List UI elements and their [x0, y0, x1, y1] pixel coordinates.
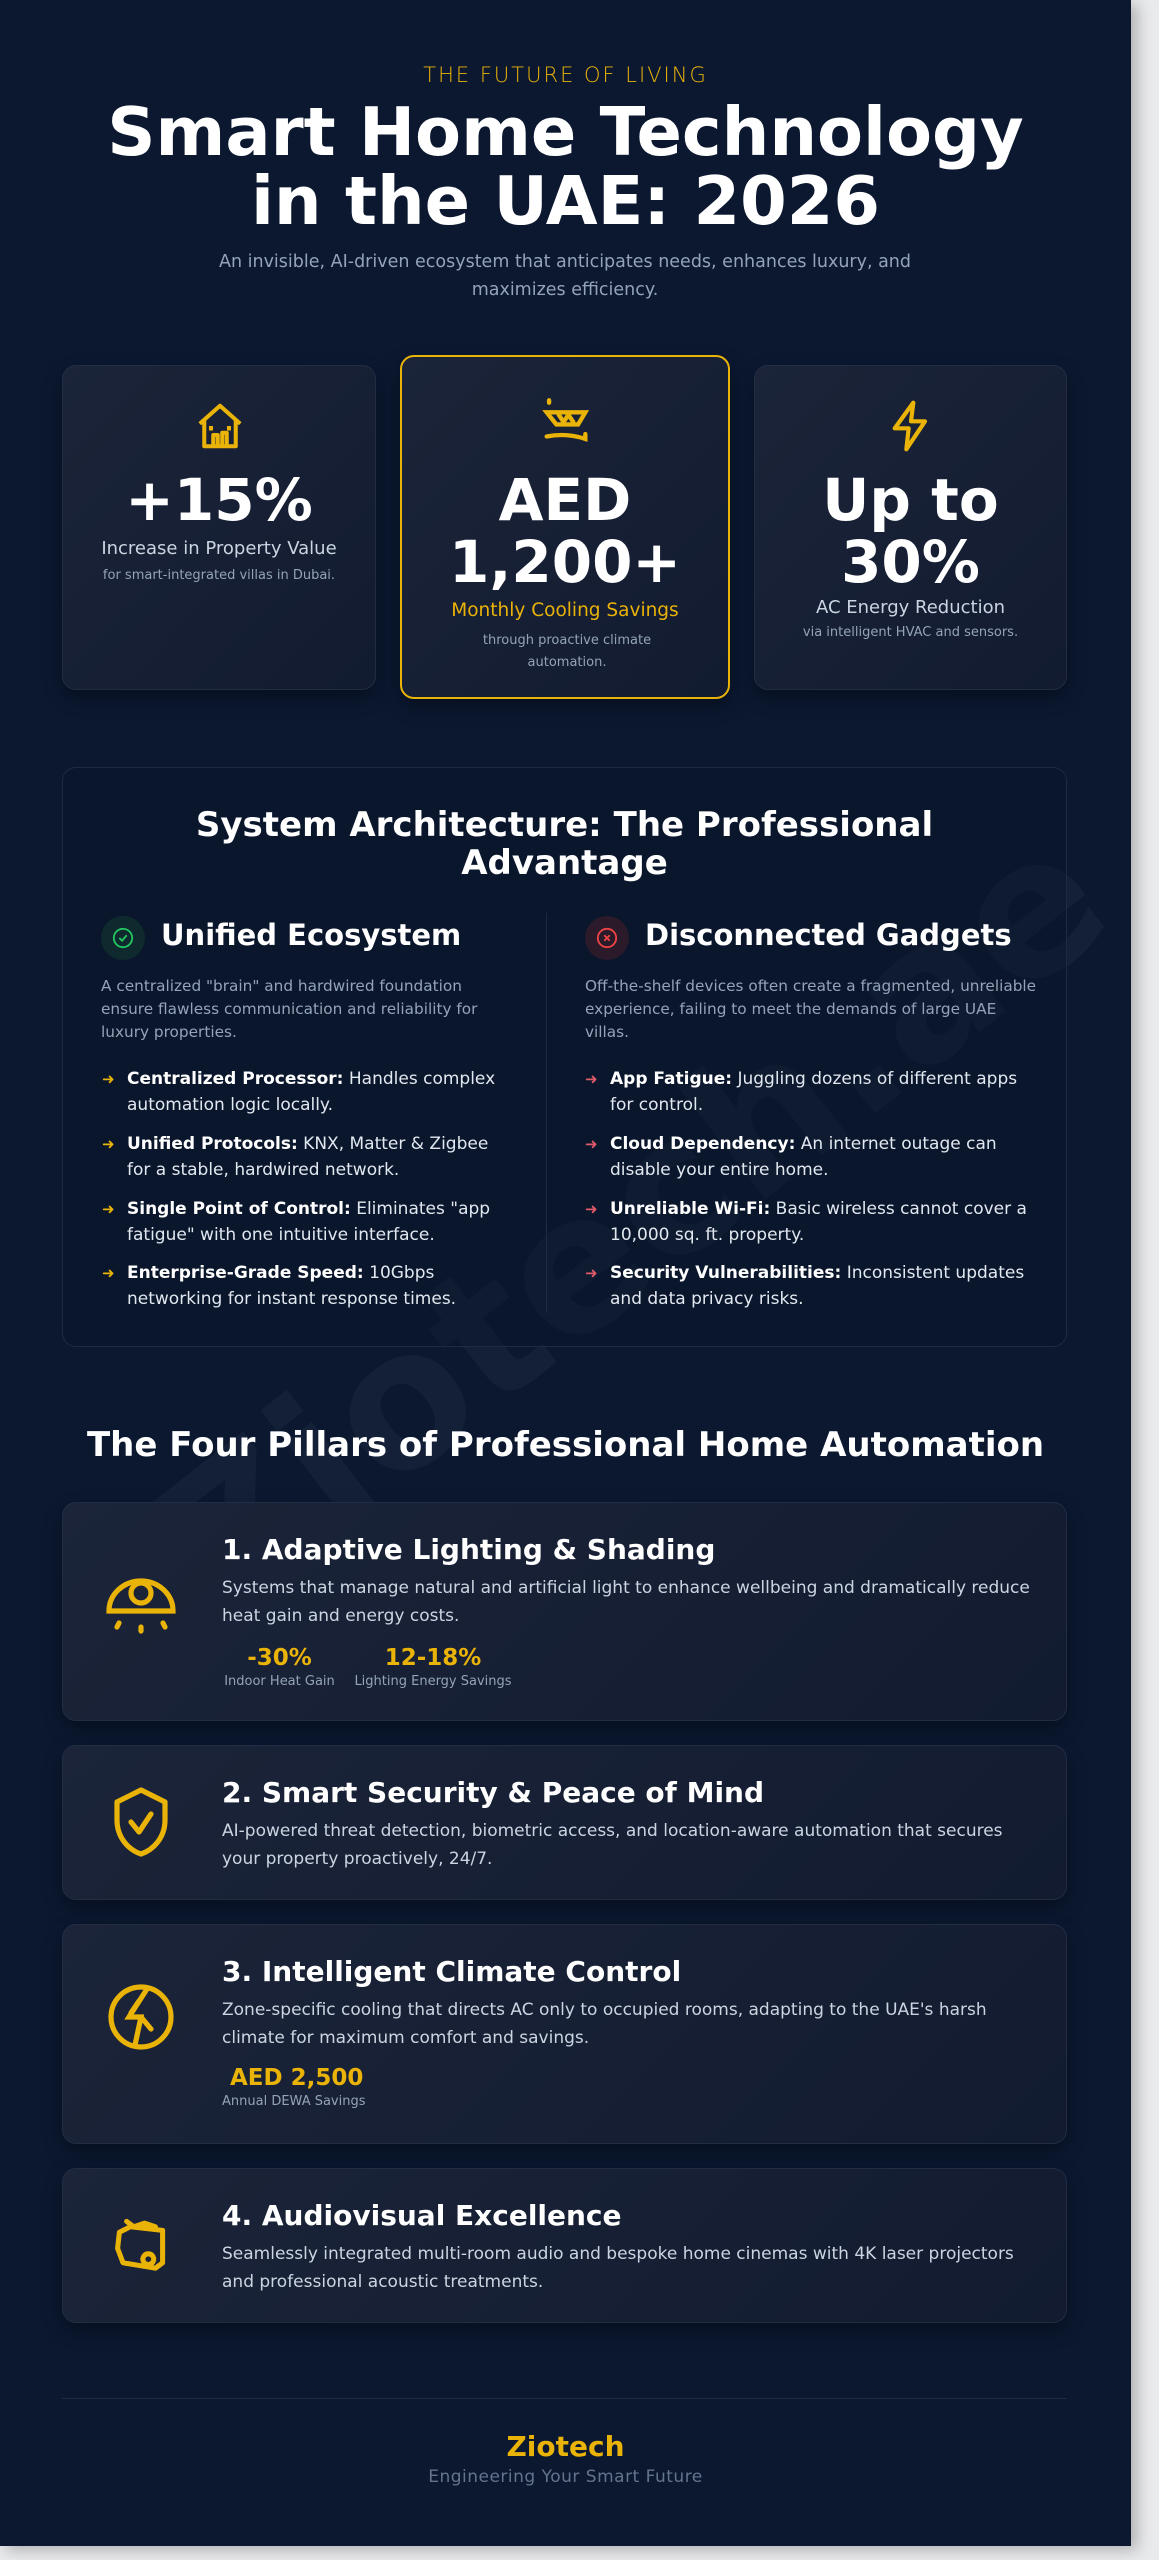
stat: AED 2,500 — [230, 2065, 363, 2091]
pillar 2: 2. Smart Security & Peace of Mind — [222, 1776, 764, 1809]
pillar 3: 3. Intelligent Climate Control — [222, 1955, 681, 1988]
column: disconnected gadgets: ➜ — [585, 1135, 598, 1153]
column: disconnected gadgets: experience, failing to meet the demands of large UAE — [585, 1000, 996, 1018]
stats: -30% — [247, 1645, 312, 1671]
stat card: AC energy: AC Energy Reduction — [816, 597, 1005, 618]
pillar 4: 4. Audiovisual Excellence — [222, 2199, 622, 2232]
column: disconnected gadgets: App Fatigue: Juggling dozens of different apps for control. — [610, 1069, 1017, 1115]
stat card: cooling savings: Monthly Cooling Savings — [451, 600, 679, 621]
stat — [222, 2065, 366, 2109]
icon: climate — [108, 1984, 174, 2050]
icon: shield — [114, 1787, 168, 1857]
footer brand: Engineering Your Smart Future — [428, 2467, 703, 2487]
column: unified ecosystem — [101, 916, 495, 1309]
column: unified ecosystem: Unified Ecosystem — [161, 918, 461, 952]
icon: audiovisual — [115, 2218, 166, 2271]
heading: System Architecture: The Professional — [196, 805, 933, 845]
icon: check — [101, 916, 145, 960]
pillar 1: Lighting Energy Savings — [354, 1674, 512, 1689]
stats — [224, 1645, 335, 1689]
pillar 3 — [62, 1924, 1067, 2144]
column: disconnected gadgets: Disconnected Gadgets — [645, 918, 1012, 952]
column: unified ecosystem: ➜ — [102, 1200, 115, 1218]
stats: Indoor Heat Gain — [224, 1674, 335, 1689]
column: disconnected gadgets: Unreliable Wi-Fi: Basic wireless cannot cover a 10,000 sq. ft. property. — [610, 1199, 1027, 1245]
stat card: property value — [62, 365, 376, 690]
heading: Advantage — [461, 843, 668, 883]
stat card: property value: Increase in Property Value — [101, 538, 337, 559]
value: 1,200+ — [449, 528, 681, 596]
icon: lighting — [106, 1578, 176, 1634]
panel: system architecture — [62, 767, 1067, 1347]
column: unified ecosystem: A centralized "brain" and hardwired foundation ensure flawless communication and reliability for luxury properties. — [101, 977, 477, 1041]
footer brand: Ziotech — [506, 2430, 625, 2463]
column: unified ecosystem: ➜ — [102, 1070, 115, 1088]
value — [822, 466, 999, 596]
column: unified ecosystem: Single Point of Control: Eliminates "app fatigue" with one intuitive interface. — [127, 1199, 490, 1245]
column: disconnected gadgets: ➜ — [585, 1264, 598, 1282]
stat card: cooling savings — [400, 355, 730, 699]
stat: Annual DEWA Savings — [222, 2094, 366, 2109]
column: unified ecosystem: ➜ — [102, 1264, 115, 1282]
stat card: cooling savings: through proactive climate automation. — [483, 633, 651, 670]
subtitle: An invisible, AI-driven ecosystem that anticipates needs, enhances luxury, and maximizes efficiency. — [219, 252, 911, 300]
column: disconnected gadgets: ➜ — [585, 1200, 598, 1218]
title — [107, 93, 1024, 240]
stat card: AC energy — [754, 365, 1067, 690]
pillar 1: 12-18% — [385, 1645, 481, 1671]
value: Up to — [822, 466, 999, 534]
pillar 2 — [62, 1745, 1067, 1900]
pillar 1: Systems that manage natural and artificial light to enhance wellbeing and dramatically reduce heat gain and energy costs. — [222, 1578, 1030, 1626]
pillar 3: Zone-specific cooling that directs AC only to occupied rooms, adapting to the UAE's harsh climate for maximum comfort and savings. — [222, 2000, 987, 2048]
pillar 4: Seamlessly integrated multi-room audio and bespoke home cinemas with 4K laser projectors and professional acoustic treatments. — [222, 2244, 1014, 2292]
column: unified ecosystem: Enterprise-Grade Speed: 10Gbps networking for instant response times. — [127, 1263, 456, 1309]
value — [449, 466, 681, 596]
column: unified ecosystem: Unified Protocols: KNX, Matter & Zigbee for a stable, hardwired network. — [127, 1134, 488, 1180]
title: Smart Home Technology — [107, 93, 1024, 171]
column: disconnected gadgets: Security Vulnerabilities: Inconsistent updates and data privacy risks. — [610, 1263, 1024, 1309]
pillar 2: AI-powered threat detection, biometric access, and location-aware automation that secures your property proactively, 24/7. — [222, 1821, 1003, 1869]
column: unified ecosystem: Centralized Processor: Handles complex automation logic locally. — [127, 1069, 495, 1115]
value: AED — [499, 466, 631, 534]
icon: bolt — [892, 400, 928, 452]
icon: x — [585, 916, 629, 960]
watermark: Ziotech.ae — [120, 784, 1131, 1654]
value: +15% — [125, 466, 313, 534]
stat card: AC energy: via intelligent HVAC and sensors. — [803, 625, 1018, 640]
column: unified ecosystem: ➜ — [102, 1135, 115, 1153]
column: disconnected gadgets — [585, 916, 1036, 1309]
column: disconnected gadgets: Cloud Dependency: An internet outage can disable your entire home. — [610, 1134, 997, 1180]
stat card: property value: for smart-integrated villas in Dubai. — [103, 568, 335, 583]
value: 30% — [841, 528, 980, 596]
pillar 1: 1. Adaptive Lighting & Shading — [222, 1533, 715, 1566]
icon: house — [198, 404, 242, 448]
footer brand — [428, 2430, 703, 2487]
column: disconnected gadgets: Off-the-shelf devices often create a fragmented, unreliable — [585, 977, 1036, 995]
pillars heading: The Four Pillars of Professional Home Automation — [87, 1425, 1044, 1465]
pillar 4 — [62, 2168, 1067, 2323]
title: in the UAE: 2026 — [251, 162, 880, 240]
column: disconnected gadgets: villas. — [585, 1023, 629, 1041]
column: disconnected gadgets: ➜ — [585, 1070, 598, 1088]
icon: cooling — [542, 398, 590, 442]
eyebrow: THE FUTURE OF LIVING — [423, 63, 708, 87]
pillar 1 — [62, 1502, 1067, 1721]
heading — [196, 805, 933, 883]
